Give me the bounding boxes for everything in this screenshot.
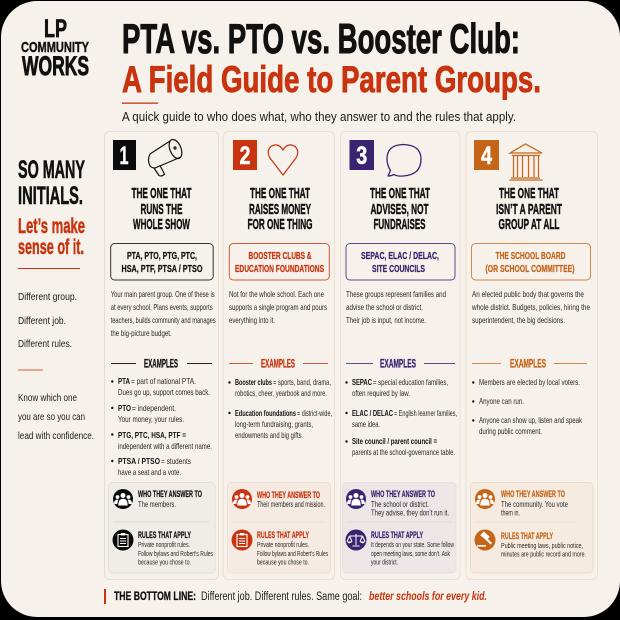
icon: scales [346, 530, 366, 550]
number badge 1 [113, 140, 136, 170]
who they answer to: The school or district. [371, 500, 429, 509]
examples list: Your money, your rules. [118, 414, 184, 424]
rules that apply: Follow bylaws and Robert’s Rules [138, 549, 213, 558]
description [346, 289, 446, 325]
icon: people [113, 489, 133, 509]
icon: heart [268, 145, 298, 175]
panel: column 4 School board [466, 132, 598, 580]
examples list [345, 377, 457, 457]
description: advise the school or district. [346, 302, 423, 312]
who they answer to [138, 489, 202, 509]
panel: column 1 PTA [104, 132, 218, 580]
panel: who they answer to and rules [228, 482, 330, 573]
description: An elected public body that governs the [472, 289, 584, 299]
heading: RUNS THE [140, 202, 183, 218]
examples list: = district-wide, [297, 408, 332, 418]
sidebar heading [18, 156, 85, 210]
number badge 2: 2 [240, 142, 250, 170]
rules that apply [138, 530, 213, 566]
examples heading [111, 358, 212, 370]
name box: EDUCATION FOUNDATIONS [235, 263, 324, 275]
examples heading: EXAMPLES [510, 358, 546, 370]
examples heading: EXAMPLES [380, 358, 416, 370]
sidebar closing text: lead with confidence. [18, 430, 94, 442]
heading: THE ONE THAT [132, 186, 192, 202]
bottom line [104, 589, 487, 604]
examples list: Site council / parent council = [352, 436, 437, 446]
icon: people [475, 489, 495, 509]
examples list: = sports, band, drama, [273, 377, 331, 387]
panel: column 2 Booster clubs [224, 132, 334, 580]
examples list: = part of national PTA. [131, 376, 196, 386]
rules that apply: It depends on your state. Some follow [371, 540, 455, 549]
name box: (OR SCHOOL COMMITTEE) [486, 263, 574, 275]
examples list: robotics, cheer, yearbook and more. [235, 388, 327, 398]
sidebar red heading [18, 215, 85, 259]
sidebar closing text: you are so you can [18, 411, 85, 423]
name box: PTA, PTO, PTG, PTC, [127, 250, 197, 262]
examples list: PTSA / PTSO [118, 456, 160, 466]
description: supports a single program and pours [229, 302, 327, 312]
heading [496, 186, 562, 233]
description: Not for the whole school. Each one [229, 289, 324, 299]
examples heading [346, 358, 455, 370]
examples heading [472, 358, 587, 370]
number badge 2 [233, 140, 257, 170]
examples list: same idea. [352, 419, 380, 429]
name box: THE SCHOOL BOARD [496, 250, 566, 262]
heading: ADVISES, NOT [370, 202, 429, 218]
logo: LP Community Works: LP [44, 15, 67, 43]
rules that apply [257, 530, 328, 566]
description: superintendent, the big decisions. [472, 315, 565, 325]
heading: THE ONE THAT [370, 186, 430, 202]
rules that apply [371, 530, 455, 566]
examples list: = English learner families, [394, 408, 457, 418]
examples list: = special education families, [373, 377, 448, 387]
name box: BOOSTER CLUBS & [248, 250, 312, 262]
examples list: Dues go up, support comes back. [118, 387, 210, 397]
examples list: Education foundations [235, 408, 296, 418]
heading [132, 186, 192, 233]
examples list: parents at the school-governance table. [352, 447, 455, 457]
title [122, 15, 541, 100]
name box: SITE COUNCILS [372, 263, 425, 275]
sidebar closing text [18, 392, 94, 442]
rules that apply: minutes are public record and more. [501, 550, 586, 558]
sidebar heading: SO MANY [18, 156, 85, 184]
examples list: PTA [118, 376, 130, 386]
description: Your main parent group. One of these is [111, 289, 215, 299]
examples list: PTO [118, 403, 131, 413]
icon: people [346, 489, 366, 509]
sidebar list: Different group. [18, 291, 77, 303]
left sidebar [18, 156, 94, 442]
logo: LP Community Works [21, 15, 89, 81]
who they answer to: The members. [138, 500, 176, 509]
rules that apply: because you chose to. [138, 558, 191, 566]
icon: courthouse [510, 144, 542, 180]
rules that apply: Private nonprofit rules. [257, 540, 309, 549]
name box [229, 244, 329, 280]
logo: LP Community Works: WORKS [22, 51, 89, 81]
rules that apply: open meeting laws, some don’t. Ask [371, 549, 450, 558]
subtitle: A quick guide to who does what, who they answer to and the rules that apply. [122, 109, 516, 124]
examples list [111, 376, 212, 477]
bottom line: THE BOTTOM LINE: [114, 589, 196, 603]
sidebar red heading: sense of it. [18, 236, 84, 259]
description: These groups represent families and [346, 289, 446, 299]
heading: WHOLE SHOW [133, 217, 190, 233]
rules that apply: Follow bylaws and Robert’s Rules [257, 549, 328, 558]
examples list: SEPAC [352, 377, 372, 387]
examples list [228, 377, 332, 440]
who they answer to [257, 490, 325, 509]
who they answer to: WHO THEY ANSWER TO [138, 489, 202, 500]
number badge 3 [350, 140, 374, 170]
rules that apply: RULES THAT APPLY [371, 530, 423, 541]
examples list: = independent. [132, 403, 176, 413]
description [229, 289, 327, 325]
who they answer to: Their members and mission. [257, 500, 325, 509]
examples list: ELAC / DELAC [352, 408, 393, 418]
examples list: Anyone can run. [479, 396, 524, 406]
icon: clipboard [232, 530, 252, 550]
examples list: independent with a different name. [118, 441, 212, 451]
heading: FOR ONE THING [248, 217, 312, 233]
description: at every school. Plans events, supports [111, 302, 213, 312]
examples heading: EXAMPLES [261, 358, 295, 370]
who they answer to: WHO THEY ANSWER TO [257, 490, 320, 501]
description [471, 289, 590, 325]
who they answer to: They advise, they don’t run it. [371, 508, 449, 518]
rules that apply: Private nonprofit rules. [138, 540, 190, 549]
sidebar closing text: Know which one [18, 392, 77, 404]
number badge 3: 3 [356, 142, 367, 170]
examples list: long-term fundraising, grants, [235, 419, 313, 429]
examples list: PTG, PTC, HSA, PTF = [118, 430, 186, 440]
panel: column 3 SEPAC, ELAC [340, 132, 460, 580]
heading [370, 186, 430, 233]
sidebar list: Different job. [18, 315, 66, 327]
icon: megaphone [148, 138, 184, 176]
logo: LP Community Works: COMMUNITY [21, 39, 89, 56]
sidebar heading: INITIALS. [18, 182, 83, 210]
icon: people [232, 489, 252, 509]
examples list: endowments and big gifts. [235, 430, 303, 440]
heading: THE ONE THAT [499, 186, 559, 202]
panel: who they answer to and rules [342, 482, 456, 573]
sidebar list: Different rules. [18, 338, 72, 350]
title rule [122, 102, 158, 104]
who they answer to: WHO THEY ANSWER TO [501, 489, 565, 500]
number badge 4 [474, 140, 499, 170]
rules that apply: RULES THAT APPLY [501, 531, 553, 542]
examples list: during public comment. [479, 426, 542, 436]
who they answer to: WHO THEY ANSWER TO [371, 489, 435, 500]
heading: RAISES MONEY [249, 202, 311, 218]
description: everything into it. [229, 315, 275, 325]
number badge 4: 4 [481, 142, 492, 170]
who they answer to [501, 489, 568, 518]
heading: ISN’T A PARENT [496, 202, 562, 218]
icon: clipboard [112, 530, 134, 550]
heading: GROUP AT ALL [498, 217, 560, 233]
name box [472, 244, 590, 280]
examples list: Booster clubs [235, 377, 272, 387]
rules that apply: RULES THAT APPLY [257, 530, 309, 541]
description: Their job is input, not income. [346, 315, 426, 325]
rules that apply: RULES THAT APPLY [138, 530, 191, 541]
bottom line: better schools for every kid. [369, 591, 487, 603]
examples list: Anyone can show up, listen and speak [479, 415, 583, 425]
icon: speech bubble [387, 144, 421, 176]
name box [111, 244, 213, 280]
examples heading: EXAMPLES [144, 358, 178, 370]
who they answer to: The community. You vote [501, 500, 568, 509]
rules that apply: your district. [371, 558, 398, 566]
name box [346, 244, 455, 280]
who they answer to: them in. [501, 508, 520, 518]
number badge 1: 1 [120, 142, 129, 170]
description: teachers, builds community and manages [111, 315, 216, 325]
rules that apply: Public meeting laws, public notice, [501, 541, 583, 550]
examples list: Members are elected by local voters. [479, 377, 580, 387]
bottom line: Different job. Different rules. Same goal: [201, 591, 362, 603]
heading [248, 186, 312, 233]
description: the big-picture budget. [111, 328, 172, 338]
description [111, 289, 216, 338]
rules that apply [501, 531, 586, 558]
examples list: = students [161, 456, 191, 466]
who they answer to [371, 489, 449, 518]
rules that apply: because you chose to. [257, 558, 309, 566]
examples heading [229, 358, 328, 370]
name box: HSA, PTF, PTSA / PTSO [122, 263, 202, 275]
examples list: often required by law. [352, 388, 410, 398]
heading: FUNDRAISES [374, 217, 426, 233]
sidebar red heading: Let’s make [18, 215, 85, 238]
heading: THE ONE THAT [250, 186, 310, 202]
panel: who they answer to and rules [108, 482, 215, 573]
examples list: have a seat and a vote. [118, 467, 181, 477]
examples list [472, 377, 583, 436]
name box: SEPAC, ELAC / DELAC, [361, 250, 439, 262]
panel: who they answer to and rules [470, 482, 593, 573]
sidebar list [18, 291, 77, 350]
icon: gavel [474, 530, 496, 550]
